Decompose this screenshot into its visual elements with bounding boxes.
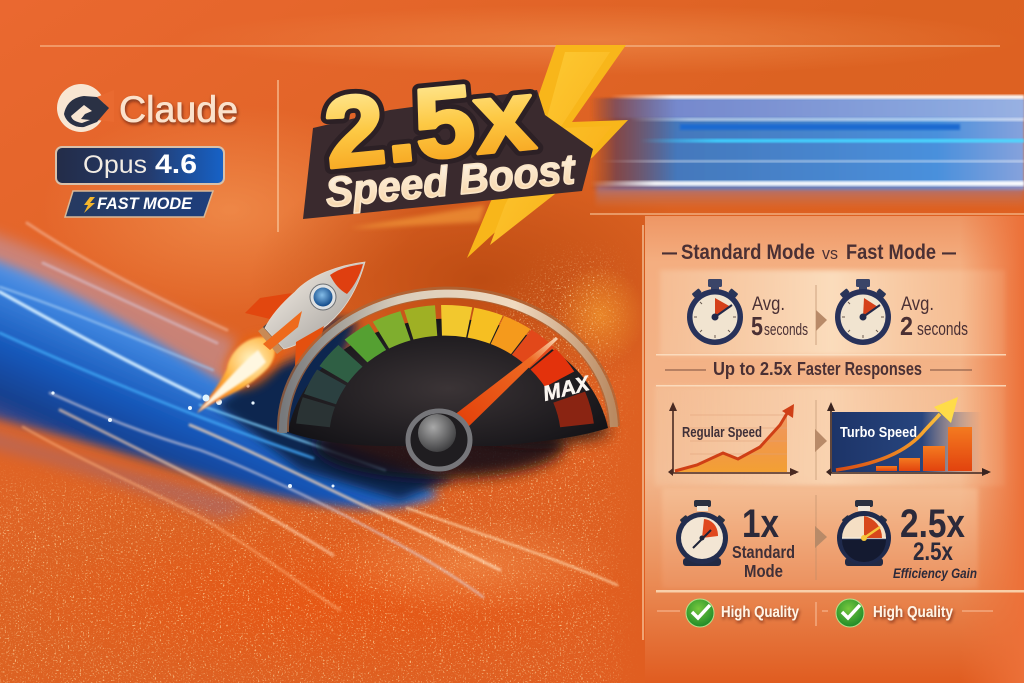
icon: stopwatch standard bbox=[687, 279, 743, 345]
subheading: Up to 2.5x Faster Responses: Faster Responses bbox=[797, 359, 922, 379]
icon: small lightning bbox=[84, 197, 95, 213]
divider arrow 2 bbox=[815, 400, 827, 480]
heading: Standard Mode vs Fast Mode: Fast Mode bbox=[846, 241, 936, 264]
text: high quality 1: High Quality bbox=[721, 604, 799, 621]
icon: check 1 bbox=[686, 599, 714, 627]
2.5x: 2.5x bbox=[320, 58, 539, 190]
speed swoosh: left blue trail bbox=[0, 222, 617, 610]
icon: stopwatch 1x bbox=[676, 500, 728, 566]
logo mark bbox=[57, 84, 114, 132]
nozzle bbox=[258, 319, 292, 354]
heading: Standard Mode vs Fast Mode: Standard Mode bbox=[681, 241, 815, 264]
text: average 5 seconds: Avg. bbox=[752, 294, 785, 315]
panel: comparison bbox=[642, 216, 1024, 683]
dark plate bbox=[303, 90, 593, 219]
decorative frame lines bbox=[40, 46, 1024, 232]
chart bars bbox=[876, 427, 972, 471]
icon: check 2 bbox=[836, 599, 864, 627]
divider arrow 3 bbox=[815, 495, 827, 580]
needle hub bbox=[408, 411, 470, 469]
logo: Claude bbox=[57, 84, 238, 132]
text: 1x standard mode: Mode bbox=[744, 561, 783, 581]
speed streaks: top right bbox=[590, 95, 1024, 206]
subheading: Up to 2.5x Faster Responses: Up to 2.5x bbox=[713, 359, 792, 379]
gauge scale segments bbox=[257, 271, 633, 609]
orange under-glow bbox=[350, 205, 485, 228]
text: 1x standard mode: 1x bbox=[742, 502, 779, 546]
rear fin bbox=[245, 293, 292, 319]
chart label: Turbo Speed bbox=[840, 424, 917, 441]
heading: Standard Mode vs Fast Mode: — bbox=[942, 241, 956, 264]
chart axes bbox=[831, 405, 988, 473]
badge: Opus 4.6: Opus bbox=[83, 151, 147, 179]
badge: Opus 4.6: 4.6 bbox=[155, 149, 197, 179]
text: average 5 seconds bbox=[751, 294, 808, 341]
gauge shadow bbox=[315, 411, 565, 479]
text: 1x standard mode bbox=[732, 502, 795, 581]
rocket centre fin bbox=[263, 311, 302, 350]
icon: stopwatch 2.5x bbox=[837, 500, 891, 566]
chart: regular speed bbox=[668, 402, 799, 476]
text: average 2 seconds bbox=[900, 294, 968, 341]
chart: turbo speed bbox=[826, 397, 995, 476]
text: 2.5x efficiency gain bbox=[893, 502, 977, 581]
needle bbox=[449, 337, 558, 431]
2.5x: 2.5x bbox=[320, 58, 539, 190]
gauge face bbox=[288, 319, 608, 446]
logo wordmark: Claude bbox=[119, 89, 238, 130]
quality row dividers bbox=[657, 602, 993, 626]
text: 2.5x efficiency gain: 2.5x bbox=[913, 538, 953, 566]
chart trend arrow bbox=[675, 404, 794, 471]
glitter speckle texture bbox=[0, 240, 640, 683]
badge: Opus 4.6 bbox=[56, 147, 224, 184]
lower fin bbox=[295, 326, 324, 366]
text: 2.5x efficiency gain: Efficiency Gain bbox=[893, 565, 977, 581]
text: average 2 seconds: 2 bbox=[900, 311, 913, 341]
rocket nose bbox=[330, 264, 363, 294]
rocket flame bbox=[197, 325, 291, 413]
rocket bbox=[197, 262, 365, 413]
gauge rim bbox=[283, 293, 614, 433]
heading: Standard Mode vs Fast Mode: vs bbox=[822, 244, 838, 263]
headline lockup: 2.5x Speed Boost bbox=[303, 45, 628, 258]
text: 2.5x efficiency gain: 2.5x bbox=[900, 502, 965, 546]
text: average 2 seconds: Avg. bbox=[901, 294, 934, 315]
rocket body bbox=[265, 262, 365, 349]
MAX label: MAX bbox=[541, 372, 594, 406]
gauge dark glow right bbox=[470, 416, 610, 444]
chart label: Regular Speed bbox=[682, 424, 762, 441]
text: average 2 seconds: seconds bbox=[917, 319, 968, 339]
text: 1x standard mode: Standard bbox=[732, 542, 795, 562]
heading: Standard Mode vs Fast Mode: — bbox=[662, 241, 677, 264]
icon: lightning bolt bbox=[467, 45, 628, 258]
text: average 5 seconds: 5 bbox=[751, 311, 763, 341]
badge: Fast Mode: FAST MODE bbox=[97, 194, 193, 213]
heading: Standard Mode vs Fast Mode bbox=[662, 241, 956, 264]
badge: Fast Mode bbox=[65, 191, 213, 217]
chart growth arrow bbox=[836, 397, 958, 470]
Speed Boost: Speed Boost bbox=[323, 145, 579, 216]
icon: stopwatch fast bbox=[835, 279, 891, 345]
rocket window bbox=[310, 284, 336, 310]
text: high quality 2: High Quality bbox=[873, 604, 953, 621]
chart axes bbox=[673, 405, 796, 473]
divider arrow 1 bbox=[816, 285, 827, 345]
text: average 5 seconds: seconds bbox=[764, 320, 808, 339]
speedometer gauge bbox=[257, 271, 633, 609]
subheading: Up to 2.5x Faster Responses bbox=[665, 359, 972, 379]
